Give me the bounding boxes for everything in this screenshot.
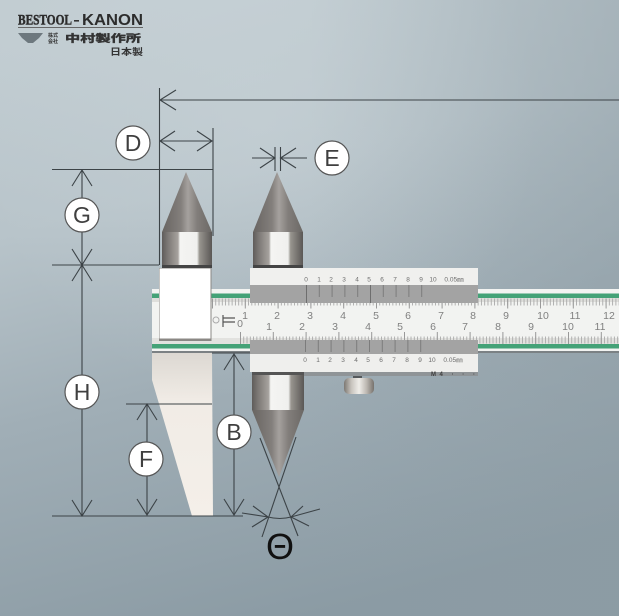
main scale upper numbers: 9 [503, 310, 509, 322]
logo: 株式 [48, 32, 58, 39]
main scale upper numbers: 7 [438, 310, 444, 322]
vernier lower numbers: 8 [405, 357, 409, 364]
dimension D [116, 126, 213, 236]
vernier lower numbers: 9 [418, 357, 422, 364]
dimension F: F [139, 446, 153, 472]
vernier upper numbers: 10 [429, 276, 437, 284]
vernier upper numbers: 6 [380, 276, 384, 284]
vernier lower numbers: 4 [354, 357, 358, 364]
square block on fixed jaw [159, 268, 212, 341]
vernier lower numbers: 0.05㎜ [443, 357, 463, 364]
main scale lower numbers: 1 [266, 321, 272, 333]
vernier upper numbers: 2 [329, 276, 333, 284]
vernier slider lower [250, 340, 478, 378]
lower jaw [152, 353, 213, 516]
dimension B [212, 353, 251, 515]
dimension D: D [125, 130, 141, 156]
main scale lower numbers: 8 [495, 321, 501, 333]
logo: 会社 [48, 38, 58, 45]
vernier upper numbers: 7 [393, 276, 397, 284]
main scale upper numbers: 2 [274, 310, 280, 322]
vernier upper numbers: 5 [367, 276, 371, 284]
dimension G [52, 170, 213, 265]
main scale upper numbers: 11 [570, 310, 581, 322]
vernier slider upper [250, 268, 478, 303]
left measuring pin [162, 172, 212, 268]
main scale lower numbers: 10 [562, 321, 574, 333]
vernier upper numbers: 8 [406, 276, 410, 284]
main scale lower numbers: 11 [595, 321, 606, 333]
brand mark on beam [223, 315, 235, 327]
main scale upper numbers: 4 [340, 310, 346, 322]
vernier lower numbers: 2 [328, 357, 332, 364]
main scale upper numbers: 8 [470, 310, 476, 322]
angle theta symbol: Θ [266, 526, 294, 567]
logo [18, 12, 143, 57]
slider marking: M4 · · · [431, 372, 475, 378]
dimension E [252, 141, 349, 175]
vernier lower numbers: 5 [366, 357, 370, 364]
main scale lower numbers: 3 [332, 321, 338, 333]
main scale lower numbers: 6 [430, 321, 436, 333]
dimension A top arrow [160, 88, 619, 265]
main scale lower numbers: 5 [397, 321, 403, 333]
vernier lower numbers: 0 [303, 357, 307, 364]
angle theta lines [242, 437, 320, 567]
vernier lower numbers: 6 [379, 357, 383, 364]
vernier upper numbers: 4 [355, 276, 359, 284]
adjustment knob [344, 372, 374, 394]
vernier lower numbers: 7 [392, 357, 396, 364]
main scale upper numbers: 10 [537, 310, 549, 322]
logo: KANON [82, 12, 143, 29]
main scale upper numbers: 1 [242, 310, 248, 322]
logo: 中村製作所 [65, 32, 141, 45]
vernier upper numbers: 0 [304, 276, 308, 284]
main scale lower numbers: 2 [299, 321, 305, 333]
vernier upper numbers: 9 [419, 276, 423, 284]
main scale upper numbers: 6 [405, 310, 411, 322]
main scale upper numbers: 12 [603, 310, 615, 322]
dimension E: E [324, 145, 340, 171]
dimension G: G [73, 202, 91, 228]
vernier lower numbers [303, 357, 463, 364]
main scale lower numbers: 7 [462, 321, 468, 333]
vernier lower numbers: 10 [428, 357, 436, 364]
right measuring pin [253, 172, 303, 268]
main scale upper numbers: 5 [373, 310, 379, 322]
logo: 日本製 [110, 46, 143, 57]
vernier lower numbers: 1 [316, 357, 320, 364]
vernier lower numbers: 3 [341, 357, 345, 364]
main scale lower numbers: 4 [365, 321, 371, 333]
main scale lower numbers: 9 [528, 321, 534, 333]
vernier upper numbers: 3 [342, 276, 346, 284]
vernier upper numbers: 1 [317, 276, 321, 284]
vernier upper numbers: 0.05㎜ [444, 276, 464, 284]
main scale lower numbers [237, 318, 606, 333]
dimension H: H [74, 379, 90, 405]
lower measuring pin [252, 372, 304, 477]
caliper beam [152, 289, 619, 353]
main scale lower numbers: 0 [237, 318, 243, 330]
dimension B: B [226, 419, 242, 445]
dimension H [52, 265, 243, 516]
dimension F [126, 404, 212, 515]
vernier upper numbers [304, 276, 464, 284]
logo: BESTOOL [18, 12, 72, 28]
main scale upper numbers: 3 [307, 310, 313, 322]
main scale upper numbers [242, 310, 615, 322]
